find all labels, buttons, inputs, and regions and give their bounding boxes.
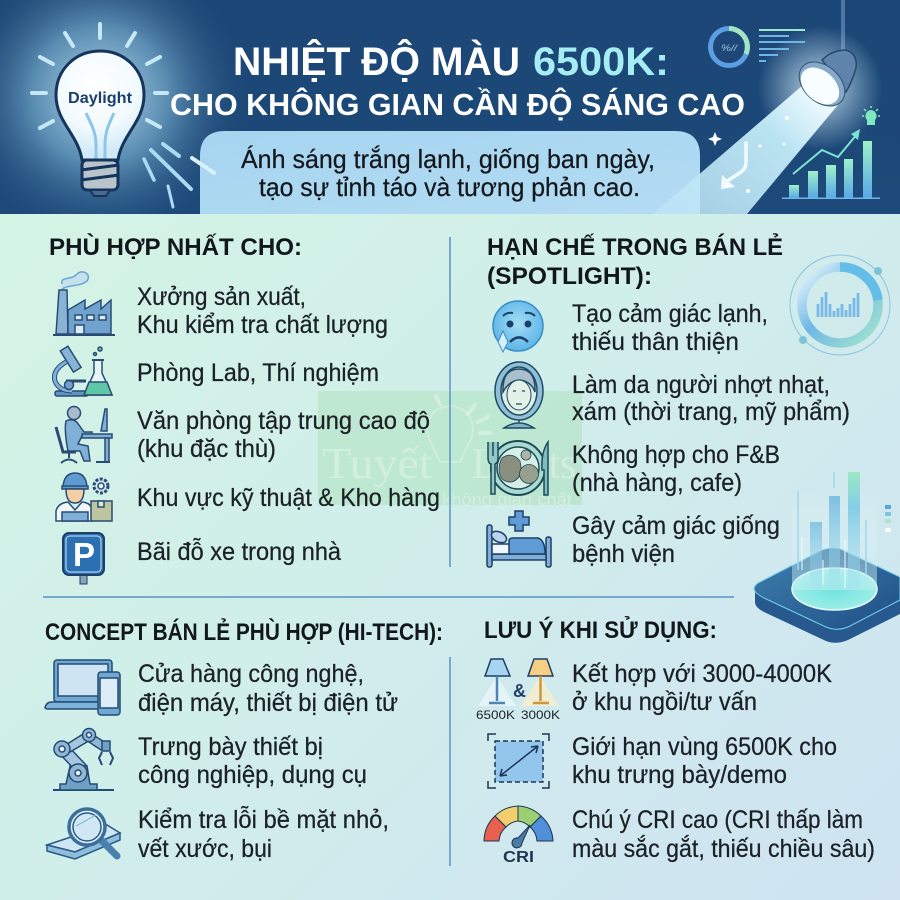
text: thiếu thân thiện <box>572 328 739 356</box>
heading: best suited: PHÙ HỢP NHẤT CHO: <box>49 233 302 261</box>
text: điện máy, thiết bị điện tử <box>138 689 398 717</box>
heading: usage notes: LƯU Ý KHI SỬ DỤNG: <box>484 615 717 644</box>
watermark: không gian chất <box>442 490 572 509</box>
dividers <box>43 237 734 866</box>
icon: hospital bed <box>487 511 551 567</box>
icon: laptop and phone <box>45 660 120 715</box>
icon: donut with lines: %// <box>721 43 739 53</box>
text: Cửa hàng công nghệ, <box>138 660 364 688</box>
icon: technician with gear and box <box>56 473 112 521</box>
panel: best suited <box>49 233 440 584</box>
text: Làm da người nhợt nhạt, <box>572 371 830 399</box>
text: Bãi đỗ xe trong nhà <box>137 537 341 566</box>
text: Trưng bày thiết bị <box>138 733 323 761</box>
icon: two lamps: 6500K <box>476 708 515 722</box>
watermark <box>318 391 582 509</box>
panel: subtitle <box>192 131 700 214</box>
heading: hi-tech retail: CONCEPT BÁN LẺ PHÙ HỢP (HI-TECH): <box>45 617 443 646</box>
icon: mirror face <box>495 362 543 428</box>
watermark: Tuyết <box>322 439 432 488</box>
text: Kết hợp với 3000-4000K <box>572 660 832 688</box>
icon: donut with lines <box>710 28 805 66</box>
text: Chú ý CRI cao (CRI thấp làm <box>572 806 863 834</box>
text: bệnh viện <box>572 540 675 568</box>
panel: subtitle: Ánh sáng trắng lạnh, giống ban ngày, <box>241 144 655 174</box>
title <box>170 38 745 122</box>
icon: two lamps: & <box>513 681 526 701</box>
title: NHIỆT ĐỘ MÀU <box>233 38 520 84</box>
text: (khu đặc thù) <box>137 435 276 463</box>
icon: daylight bulb <box>32 24 167 196</box>
icon: magnifier on surface <box>47 809 120 859</box>
text: Gây cảm giác giống <box>572 512 780 540</box>
text: Tạo cảm giác lạnh, <box>572 300 768 328</box>
panel: usage notes <box>476 615 875 866</box>
text: Khu kiểm tra chất lượng <box>137 311 388 339</box>
text: Văn phòng tập trung cao độ <box>137 407 430 435</box>
text: khu trưng bày/demo <box>572 761 787 789</box>
icon: two lamps: 3000K <box>521 708 560 722</box>
text: công nghiệp, dụng cụ <box>138 761 367 789</box>
icon: CRI gauge: CRI <box>503 849 534 866</box>
text: Khu vực kỹ thuật & Kho hàng <box>137 484 440 512</box>
icon: microscope and flask <box>54 346 112 396</box>
heading: retail limitations: (SPOTLIGHT): <box>487 263 652 290</box>
panel: header banner <box>0 0 900 214</box>
icon: parking sign <box>63 533 104 584</box>
icon: parking sign: P <box>73 536 95 573</box>
panel: retail limitations <box>487 232 850 568</box>
icon: limited zone <box>488 734 549 788</box>
text: (nhà hàng, cafe) <box>572 469 742 497</box>
text: Kiểm tra lỗi bề mặt nhỏ, <box>138 805 389 834</box>
icon: spotlight with beam <box>653 0 882 214</box>
title: CHO KHÔNG GIAN CẦN ĐỘ SÁNG CAO <box>170 86 745 122</box>
text: màu sắc gắt, thiếu chiều sâu) <box>572 834 875 863</box>
panel: hi-tech retail concepts <box>45 617 443 863</box>
icon: holographic platform <box>754 472 900 643</box>
panel: subtitle: tạo sự tỉnh táo và tương phản cao. <box>259 172 640 202</box>
heading: retail limitations <box>487 232 783 290</box>
icon: decorative ring gauge <box>790 255 890 355</box>
icon: plate of food <box>488 441 548 495</box>
text: vết xước, bụi <box>138 835 272 863</box>
icon: light streaks <box>144 144 191 207</box>
icon: daylight bulb: Daylight <box>68 90 132 107</box>
text: ở khu ngồi/tư vấn <box>572 688 757 716</box>
text: Không hợp cho F&B <box>572 441 780 469</box>
watermark: Lights <box>472 439 576 488</box>
text: xám (thời trang, mỹ phẩm) <box>572 398 850 426</box>
icon: office worker <box>56 406 112 463</box>
icon: two lamps <box>476 659 560 722</box>
icon: factory <box>53 272 115 335</box>
text: Giới hạn vùng 6500K cho <box>572 733 837 761</box>
heading: retail limitations: HẠN CHẾ TRONG BÁN LẺ <box>487 232 783 261</box>
title: 6500K: <box>533 40 669 84</box>
text: Xưởng sản xuất, <box>137 283 306 311</box>
icon: cold face <box>493 301 543 352</box>
icon: robot arm <box>53 728 114 790</box>
text: Phòng Lab, Thí nghiệm <box>137 359 379 387</box>
icon: CRI gauge <box>484 806 553 866</box>
bar chart: growth <box>782 106 880 199</box>
